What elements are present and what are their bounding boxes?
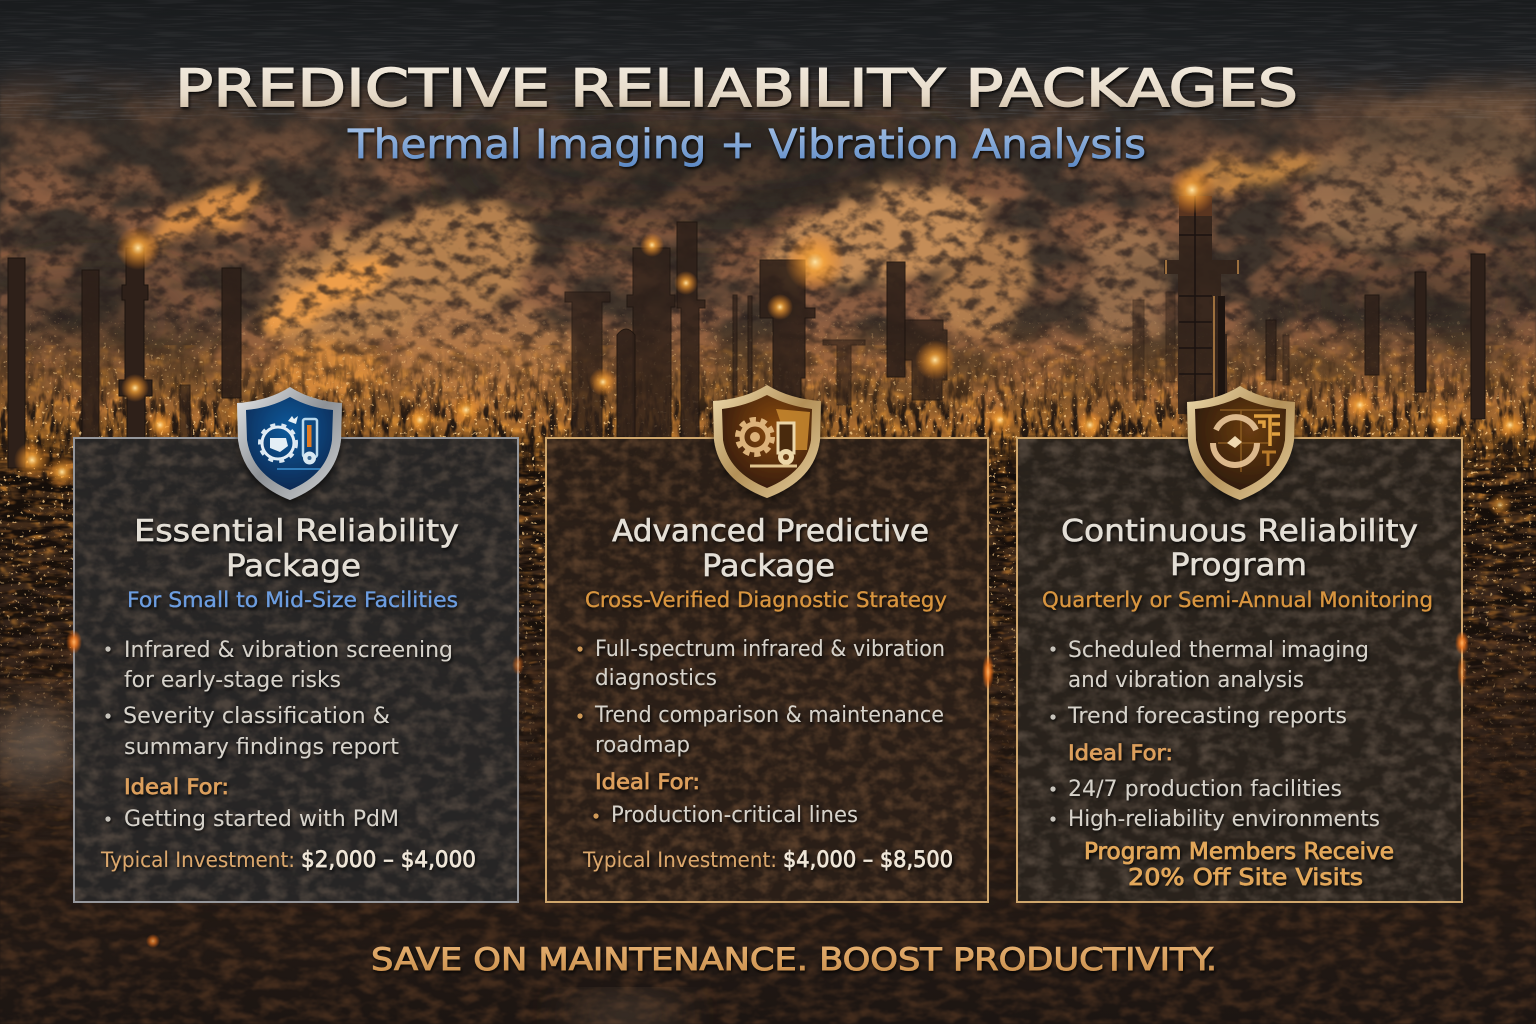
panel: Continuous Reliability Program [1017, 438, 1462, 902]
typical investment price: Typical Investment: [100, 848, 295, 872]
ideal for [105, 775, 399, 832]
panel: Essential Reliability Package [74, 438, 518, 902]
feature bullets [577, 637, 945, 758]
ideal for: Ideal For: [1068, 741, 1173, 765]
audience line: For Small to Mid-Size Facilities [127, 588, 458, 612]
heading: Advanced Predictive [612, 514, 929, 549]
icon: bronze shield with gear and gauge [713, 385, 821, 498]
heading: Program [1170, 548, 1307, 583]
feature bullets: Trend forecasting reports [1067, 704, 1347, 729]
heading: Continuous Reliability [1061, 514, 1418, 549]
heading [612, 514, 929, 584]
ideal for: High-reliability environments [1068, 807, 1380, 832]
refinery towers and stacks [8, 222, 1485, 468]
feature bullets: summary findings report [124, 735, 399, 760]
feature bullets: Infrared & vibration screening [124, 638, 453, 663]
icon: gold shield with cycle and circuit [1187, 386, 1295, 500]
panel: Advanced Predictive Package [546, 438, 988, 902]
subtitle: Thermal Imaging + Vibration Analysis [347, 122, 1146, 168]
footer tagline: SAVE ON MAINTENANCE. BOOST PRODUCTIVITY. [371, 942, 1217, 978]
typical investment price: $2,000 – $4,000 [301, 848, 476, 873]
feature bullets [105, 638, 453, 760]
edge glows on panels [66, 630, 1469, 690]
title: PREDICTIVE RELIABILITY PACKAGES [175, 59, 1298, 119]
ideal for: Ideal For: [595, 770, 700, 794]
member discount: Program Members Receive [1084, 839, 1394, 865]
feature bullets [1050, 638, 1369, 729]
feature bullets: for early-stage risks [124, 668, 341, 693]
main flare stack with platforms [1164, 196, 1238, 414]
feature bullets: Trend comparison & maintenance [594, 703, 944, 728]
heading [1061, 514, 1418, 583]
heading: Package [226, 549, 361, 584]
feature bullets: Full-spectrum infrared & vibration [595, 637, 945, 662]
ideal for: Production-critical lines [611, 803, 858, 828]
heading: Package [702, 549, 835, 584]
heading: Essential Reliability [134, 514, 459, 549]
ideal for: 24/7 production facilities [1068, 777, 1342, 802]
ideal for [1050, 741, 1380, 832]
member discount [1084, 839, 1394, 891]
ideal for [593, 770, 858, 828]
feature bullets: Severity classification & [123, 704, 390, 729]
heading [134, 514, 459, 584]
typical investment price [100, 848, 476, 873]
feature bullets: and vibration analysis [1068, 668, 1304, 693]
feature bullets: Scheduled thermal imaging [1068, 638, 1369, 663]
icon: blue shield with gear and thermometer [237, 387, 342, 500]
typical investment price: $4,000 – $8,500 [783, 848, 953, 873]
strategy line: Cross-Verified Diagnostic Strategy [585, 588, 947, 612]
typical investment price: Typical Investment: [582, 848, 777, 872]
ideal for: Getting started with PdM [124, 807, 399, 832]
feature bullets: roadmap [595, 733, 690, 758]
ideal for: Ideal For: [124, 775, 229, 799]
feature bullets: diagnostics [595, 666, 717, 691]
member discount: 20% Off Site Visits [1128, 865, 1363, 891]
monitoring line: Quarterly or Semi-Annual Monitoring [1042, 588, 1433, 612]
furnace glows and plant lights [14, 166, 1524, 517]
typical investment price [582, 848, 953, 873]
